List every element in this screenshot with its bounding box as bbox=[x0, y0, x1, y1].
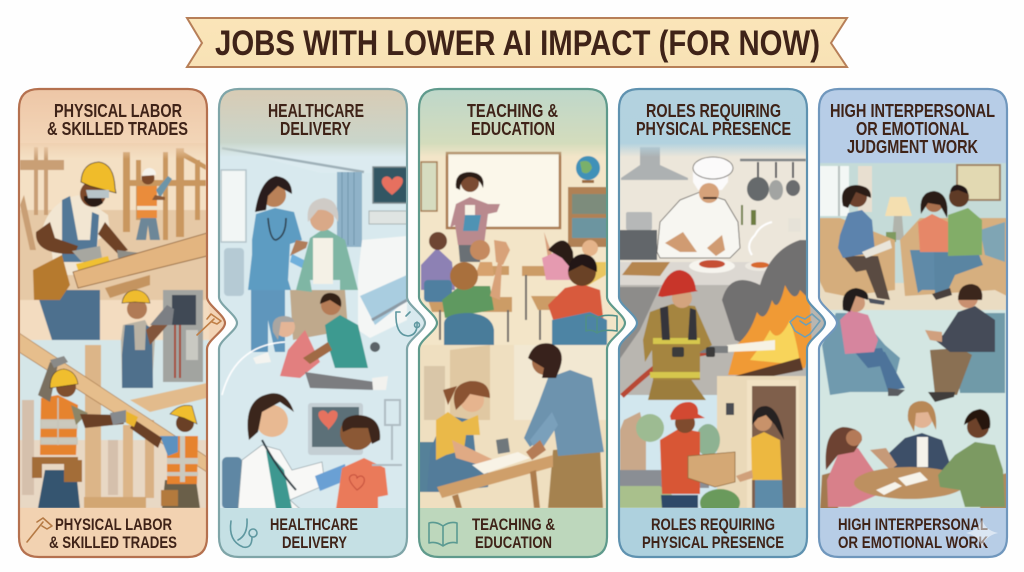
heading: roles requiring physical presence: PHYSICAL PRESENCE bbox=[636, 119, 791, 139]
couple on sofa bbox=[910, 185, 983, 300]
illustration: medical care bbox=[220, 146, 424, 508]
heading: teaching and education bbox=[467, 101, 558, 139]
caption: roles requiring physical presence: ROLES REQUIRING bbox=[651, 515, 775, 534]
students bbox=[421, 232, 607, 345]
whiteboard bbox=[447, 153, 560, 228]
delivery person bbox=[660, 402, 705, 508]
illustration: counseling sessions bbox=[819, 143, 1009, 558]
nurse bbox=[248, 176, 308, 364]
wall map bbox=[421, 162, 437, 211]
heading: healthcare delivery bbox=[268, 101, 364, 139]
patient on floor with caregiver bbox=[272, 293, 388, 390]
title: JOBS WITH LOWER AI IMPACT (FOR NOW) bbox=[215, 24, 820, 63]
caption: roles requiring physical presence: PHYSICAL PRESENCE bbox=[642, 533, 784, 552]
caption: healthcare delivery bbox=[270, 515, 358, 552]
heading: roles requiring physical presence: ROLES REQUIRING bbox=[646, 101, 781, 121]
shelf and workshop back bbox=[450, 345, 490, 420]
firefighter bbox=[643, 270, 715, 400]
icon: handshake on tab bbox=[790, 314, 820, 337]
heading: healthcare delivery: HEALTHCARE bbox=[268, 101, 364, 121]
lamp bbox=[885, 197, 912, 242]
worker supporting beam bbox=[126, 405, 200, 508]
heading: physical labor: PHYSICAL LABOR bbox=[54, 101, 182, 121]
caption: physical labor bbox=[49, 515, 177, 552]
parcel bbox=[688, 452, 735, 487]
dishes bbox=[622, 222, 775, 276]
teacher helping student bbox=[524, 343, 604, 508]
chef bbox=[657, 157, 740, 258]
wall picture bbox=[957, 165, 1000, 200]
panel: physical labor and skilled trades bbox=[19, 89, 225, 558]
left armchair bbox=[819, 218, 895, 296]
icon: open book bbox=[429, 522, 457, 546]
panel: healthcare delivery bbox=[219, 89, 427, 558]
table bbox=[437, 438, 553, 508]
caption: teaching and education bbox=[472, 515, 555, 552]
right sofa bbox=[900, 218, 1007, 296]
electrician bbox=[121, 290, 203, 388]
heading: high interpersonal: OR EMOTIONAL bbox=[856, 119, 969, 139]
client in chair bbox=[822, 288, 905, 396]
title banner bbox=[187, 18, 847, 67]
desks bbox=[428, 266, 558, 312]
bookshelf bbox=[568, 187, 607, 247]
caption: high interpersonal: OR EMOTIONAL WORK bbox=[838, 533, 989, 552]
fire bbox=[728, 285, 812, 384]
heading: high interpersonal: JUDGMENT WORK bbox=[847, 137, 978, 157]
illustration: chef firefighter delivery bbox=[620, 145, 824, 508]
globe bbox=[576, 156, 600, 183]
range hood bbox=[621, 147, 688, 180]
icon: hammer bbox=[27, 518, 52, 542]
heading: physical labor bbox=[47, 101, 188, 139]
caption: high interpersonal bbox=[838, 515, 989, 552]
bed bbox=[358, 236, 407, 352]
worker with sander bbox=[33, 162, 140, 340]
monitor heart bbox=[373, 167, 409, 203]
hose bbox=[622, 352, 710, 396]
icon: stethoscope bbox=[230, 519, 257, 547]
counselor in chair bbox=[925, 284, 1005, 402]
heading: roles requiring physical presence bbox=[636, 101, 791, 139]
round table meeting bbox=[820, 401, 1007, 510]
panel: roles requiring physical presence bbox=[619, 89, 827, 558]
lower beams and studs bbox=[130, 383, 207, 412]
teacher bbox=[450, 172, 500, 262]
heading: physical labor: & SKILLED TRADES bbox=[47, 119, 188, 139]
caption: teaching and education: EDUCATION bbox=[475, 533, 552, 552]
panel: high interpersonal or emotional judgment work bbox=[819, 89, 1009, 558]
heading: teaching and education: EDUCATION bbox=[471, 119, 555, 139]
doctor with child bbox=[222, 393, 388, 509]
worker in vest background bbox=[136, 168, 172, 240]
sparkle mark bbox=[966, 518, 998, 549]
caption: roles requiring physical presence bbox=[642, 515, 784, 552]
icon: stethoscope on tab bbox=[396, 312, 420, 336]
panel: teaching and education bbox=[419, 89, 627, 558]
pots rail bbox=[740, 160, 806, 232]
house bbox=[619, 376, 807, 517]
window bbox=[819, 166, 872, 216]
illustration: construction workers bbox=[20, 147, 210, 508]
icon: hammer on tab bbox=[197, 314, 221, 335]
illustration: classroom and workshop bbox=[420, 147, 624, 508]
worker lifting beam bbox=[32, 356, 127, 508]
heading: healthcare delivery: DELIVERY bbox=[280, 119, 351, 139]
caption: healthcare delivery: DELIVERY bbox=[282, 533, 348, 552]
wooden beam top bbox=[73, 233, 207, 288]
counselor bbox=[838, 185, 892, 305]
student at desk bbox=[419, 381, 498, 492]
heading: high interpersonal bbox=[830, 101, 995, 157]
icon: book on tab bbox=[586, 315, 617, 333]
caption: healthcare delivery: HEALTHCARE bbox=[270, 515, 358, 534]
caption: physical labor: & SKILLED TRADES bbox=[49, 533, 177, 552]
water stream bbox=[727, 340, 775, 352]
smoke bbox=[722, 240, 806, 342]
caption: physical labor: PHYSICAL LABOR bbox=[55, 515, 172, 534]
customer bbox=[736, 406, 784, 508]
heading: teaching and education: TEACHING & bbox=[467, 101, 558, 121]
caption: teaching and education: TEACHING & bbox=[472, 515, 555, 534]
stove bbox=[619, 212, 657, 260]
elderly patient bbox=[290, 198, 358, 340]
